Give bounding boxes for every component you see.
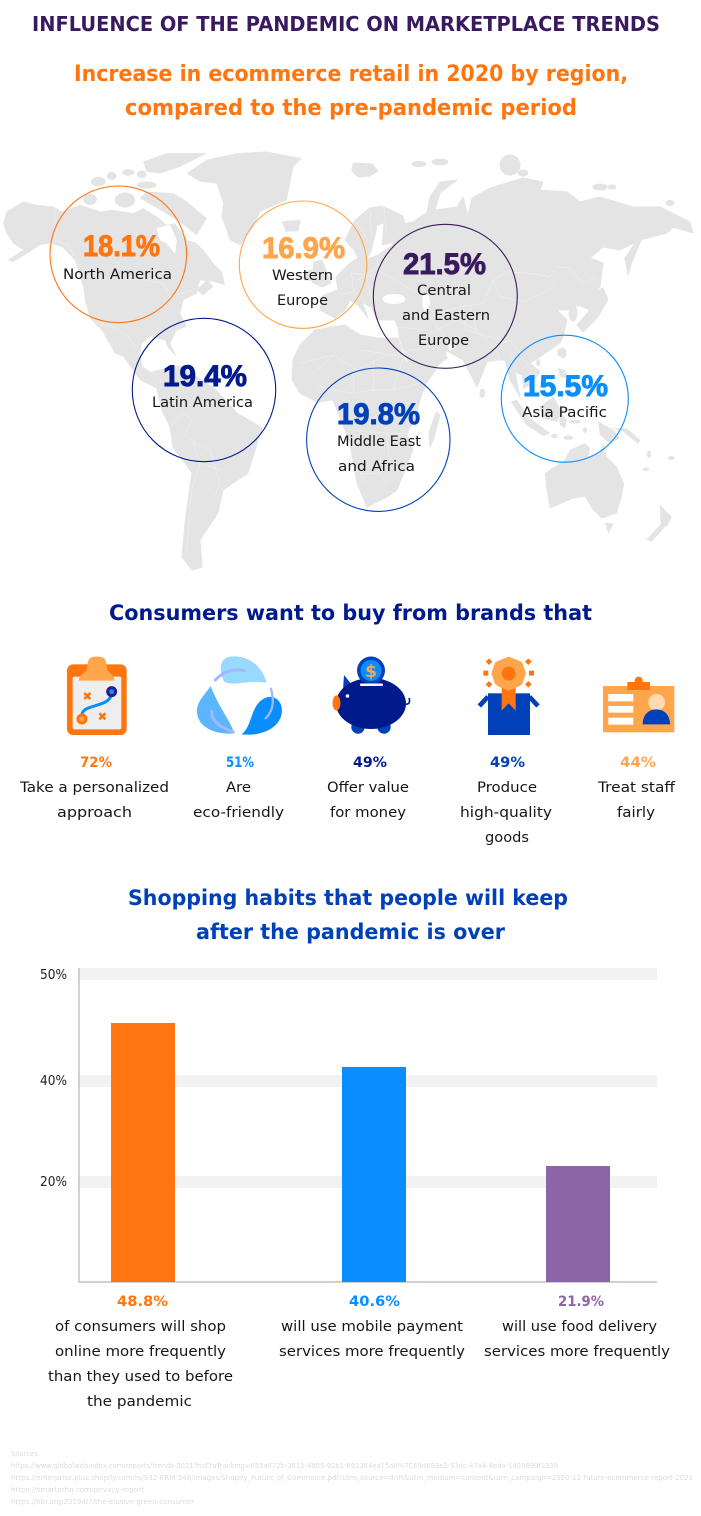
bar caption: food delivery xyxy=(484,1294,670,1360)
brand stat: personalized approach: Take a personalized xyxy=(19,780,169,796)
brand stat: high-quality goods xyxy=(460,755,552,846)
bar caption: food delivery: 21.9% xyxy=(558,1294,604,1310)
icon: piggy bank xyxy=(332,656,410,734)
region circle: North America: North America xyxy=(63,267,172,283)
sources: https://smarterhq.com/privacy-report xyxy=(11,1486,144,1494)
y axis labels: 20% xyxy=(40,1174,67,1190)
brand stat: eco-friendly: 51% xyxy=(226,755,254,771)
region circle: Western Europe: Western xyxy=(272,268,333,284)
brand stat: personalized approach xyxy=(19,755,169,821)
icon: quality award box xyxy=(479,657,538,735)
subtitle: compared to the pre-pandemic period xyxy=(125,96,577,121)
bar caption: mobile payment: 40.6% xyxy=(349,1294,400,1310)
icon: recycling leaves xyxy=(197,656,282,735)
icon: piggy bank: $ xyxy=(365,662,377,682)
brand stat: personalized approach: 72% xyxy=(80,755,112,771)
region circle: Central and Eastern Europe: and Eastern xyxy=(402,308,490,324)
heading: shopping habits: after the pandemic is over xyxy=(196,920,506,944)
heading: consumers: Consumers want to buy from brands that xyxy=(109,601,592,625)
brand stat: high-quality goods: goods xyxy=(485,830,529,846)
bar caption: mobile payment xyxy=(279,1294,465,1360)
brand stat: eco-friendly xyxy=(193,755,284,821)
region circle: North America: 18.1% xyxy=(83,230,160,263)
icon: staff ID card xyxy=(603,677,674,732)
bar caption: food delivery: will use food delivery xyxy=(502,1319,657,1335)
brand stat: high-quality goods: 49% xyxy=(490,755,525,771)
region circle: North America xyxy=(50,186,187,323)
region circle: Asia Pacific xyxy=(501,335,628,462)
y axis labels: 50% xyxy=(40,967,67,983)
brand stat: personalized approach: approach xyxy=(57,805,132,821)
bar caption: shop online xyxy=(48,1294,233,1410)
region circle: Central and Eastern Europe: Europe xyxy=(418,333,469,349)
bar caption: food delivery: services more frequently xyxy=(484,1344,670,1360)
region circle: Central and Eastern Europe xyxy=(373,224,517,368)
brand stat: treat staff fairly xyxy=(597,755,675,821)
bar: 21.9% xyxy=(546,1166,610,1282)
brand stat: value for money: Offer value xyxy=(327,780,409,796)
region circle: Central and Eastern Europe: 21.5% xyxy=(403,248,486,281)
title: INFLUENCE OF THE PANDEMIC ON MARKETPLACE TRENDS xyxy=(32,12,660,36)
bar: 48.8% xyxy=(111,1023,175,1282)
region circle: Middle East and Africa: 19.8% xyxy=(337,398,420,431)
region circle: Western Europe: 16.9% xyxy=(262,232,345,265)
region circle: Latin America: 19.4% xyxy=(163,360,247,393)
y axis labels: 40% xyxy=(40,1073,67,1089)
heading: shopping habits xyxy=(128,886,568,944)
world map xyxy=(3,152,693,570)
icon: clipboard with route xyxy=(67,657,127,735)
bar caption: mobile payment: services more frequently xyxy=(279,1344,465,1360)
region circle: Middle East and Africa: and Africa xyxy=(338,459,415,475)
sources xyxy=(11,1450,693,1506)
bar caption: mobile payment: will use mobile payment xyxy=(281,1319,464,1335)
region circle: Middle East and Africa: Middle East xyxy=(337,434,422,450)
region circle: Central and Eastern Europe: Central xyxy=(417,283,471,299)
region circle: Asia Pacific: Asia Pacific xyxy=(522,405,607,421)
region circle: Latin America: Latin America xyxy=(152,395,253,411)
brand stat: high-quality goods: high-quality xyxy=(460,805,552,821)
brand stat: treat staff fairly: Treat staff xyxy=(597,780,675,796)
brand stat: value for money: for money xyxy=(330,805,406,821)
brand stat: treat staff fairly: fairly xyxy=(617,805,655,821)
y axis labels xyxy=(40,967,67,1190)
subtitle xyxy=(74,62,628,121)
subtitle: Increase in ecommerce retail in 2020 by region, xyxy=(74,62,628,87)
bar chart xyxy=(40,967,657,1282)
bar caption: shop online: online more frequently xyxy=(55,1344,226,1360)
bar caption: shop online: 48.8% xyxy=(117,1294,168,1310)
brand stat: value for money xyxy=(327,755,409,821)
sources: https://hbr.org/2019/07/the-elusive-green-consumer xyxy=(11,1498,194,1506)
bar caption: shop online: of consumers will shop xyxy=(55,1319,226,1335)
brand stat: eco-friendly: eco-friendly xyxy=(193,805,284,821)
region circle: Middle East and Africa xyxy=(307,368,450,511)
region circle: Western Europe xyxy=(239,201,367,328)
sources: https://enterprise.plus.shopify.com/rs/932-KRM-548/images/Shopify_Future_of_Commerce.pdf?utm_source=drift&utm_medium=content&utm_campaign=2020-12-future-ecommerce-report-2021 xyxy=(11,1474,693,1482)
region circle: Latin America xyxy=(132,318,276,462)
sources: https://www.globalwebindex.com/reports/trends-2021?hsCtaTracking=855a872b-3811-4855-92b1-891384ea15a0%7C69d693e2-53dc-47a4-8eda-1420899f1339 xyxy=(11,1462,558,1470)
brand stat: high-quality goods: Produce xyxy=(477,780,537,796)
bar caption: shop online: than they used to before xyxy=(48,1369,233,1385)
brand stat: treat staff fairly: 44% xyxy=(620,755,656,771)
brand stat: value for money: 49% xyxy=(353,755,387,771)
bar: 40.6% xyxy=(342,1067,406,1282)
brand stat: eco-friendly: Are xyxy=(226,780,251,796)
region circle: Western Europe: Europe xyxy=(277,293,328,309)
region circle: Asia Pacific: 15.5% xyxy=(523,370,608,403)
bar caption: shop online: the pandemic xyxy=(87,1394,192,1410)
heading: shopping habits: Shopping habits that people will keep xyxy=(128,886,568,910)
sources: Sources: xyxy=(11,1450,40,1458)
